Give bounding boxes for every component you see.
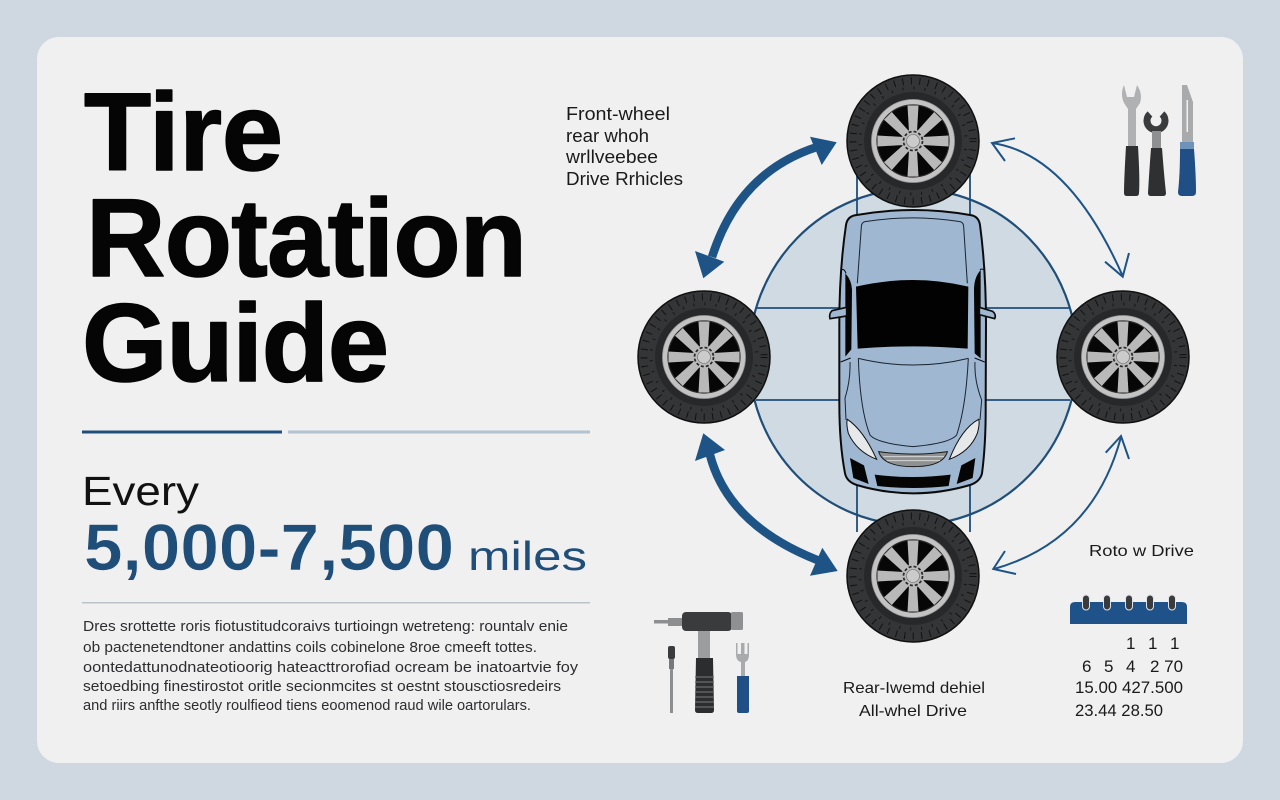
grille [879,452,947,467]
calendar mileage table: 15.00 427.500 [1075,678,1183,697]
front-wheel label: Front-wheel [566,104,670,124]
calendar mileage table: 2 70 [1150,657,1183,676]
car top view [830,210,995,493]
rear window [856,280,968,349]
icon: wrenches and screwdriver [1122,85,1196,196]
screwdriver collar [1180,142,1194,150]
title: Tire [84,71,283,194]
front-wheel label: wrllveebee [565,147,658,167]
calendar mileage table: 5 [1104,657,1113,676]
calendar mileage table: 1 [1148,634,1157,653]
right drive label: Roto w Drive [1089,543,1194,560]
hood lines [858,358,968,447]
title [82,71,527,405]
wheel: bottom [847,510,979,642]
ring wrench [1147,114,1165,130]
icon: calendar header [1070,595,1187,624]
fork handle [737,676,749,713]
calendar mileage table: 23.44 28.50 [1075,701,1163,720]
screwdriver handle [1178,149,1196,196]
arrow: thick bottom-left [695,433,838,576]
hammer grip [695,658,714,713]
wrench handle [1124,146,1139,196]
calendar mileage table: 6 [1082,657,1091,676]
small punch [668,646,675,659]
interval callout: Every [82,468,200,514]
front-wheel label: rear whoh [566,126,649,146]
roof outline [857,218,967,283]
body text block: Dres srottette roris fiotustitudcoraivs turtioingn wetreteng: rountalv enie [83,618,568,635]
arrow: thin bottom-right [993,436,1129,574]
body text block: setoedbing finestirostot oritle secionmcites st oestnt stousctiosredeirs [83,678,561,695]
calendar mileage table: 4 [1126,657,1135,676]
title divider [82,430,590,434]
wheel: left [638,291,770,423]
diagram backdrop circle and guide lines [749,170,1077,532]
rear and all-wheel label: All-whel Drive [859,703,967,720]
title: Rotation [86,177,527,300]
interval callout: 5,000-7,500 [84,510,454,584]
wheel: right [1057,291,1189,423]
body text block: ob pactenetendtoner andattins coils cobinelone 8roe cmeeft tottes. [83,639,537,656]
front-wheel label [565,104,683,189]
body text block [83,618,579,714]
arrow: thick top-left [695,137,837,278]
paragraph divider [82,602,590,604]
icon: hammer and tools [654,612,749,713]
title: Guide [82,282,389,405]
wheel: top [847,75,979,207]
body text block: oontedattunodnateotioorig hateacttrorofiad ocream be inatoartvie foy [83,659,579,676]
door lines [841,269,985,362]
calendar mileage table: 1 [1126,634,1135,653]
rear and all-wheel label: Rear-Iwemd dehiel [843,680,985,697]
headlights [847,419,877,459]
lower intakes [875,475,951,488]
fork tool [736,643,749,676]
interval callout [82,468,587,584]
interval callout: miles [468,533,587,579]
hammer head [682,612,732,631]
side windows [845,273,852,357]
hammer bit [654,620,669,624]
mirrors [830,307,995,319]
rear and all-wheel label [843,680,985,720]
hammer shaft [698,631,710,658]
ring wrench handle [1148,148,1166,196]
car body [839,210,986,493]
body text block: and riirs anfthe seotly roulfieod tiens eoomenod raud wile oartorulars. [83,697,531,714]
arrow: thin top-right [992,138,1129,277]
calendar mileage table: 1 [1170,634,1179,653]
screwdriver shaft [1182,85,1193,142]
open-end wrench [1122,85,1141,146]
front-wheel label: Drive Rrhicles [566,169,683,189]
calendar mileage table [1075,634,1183,720]
